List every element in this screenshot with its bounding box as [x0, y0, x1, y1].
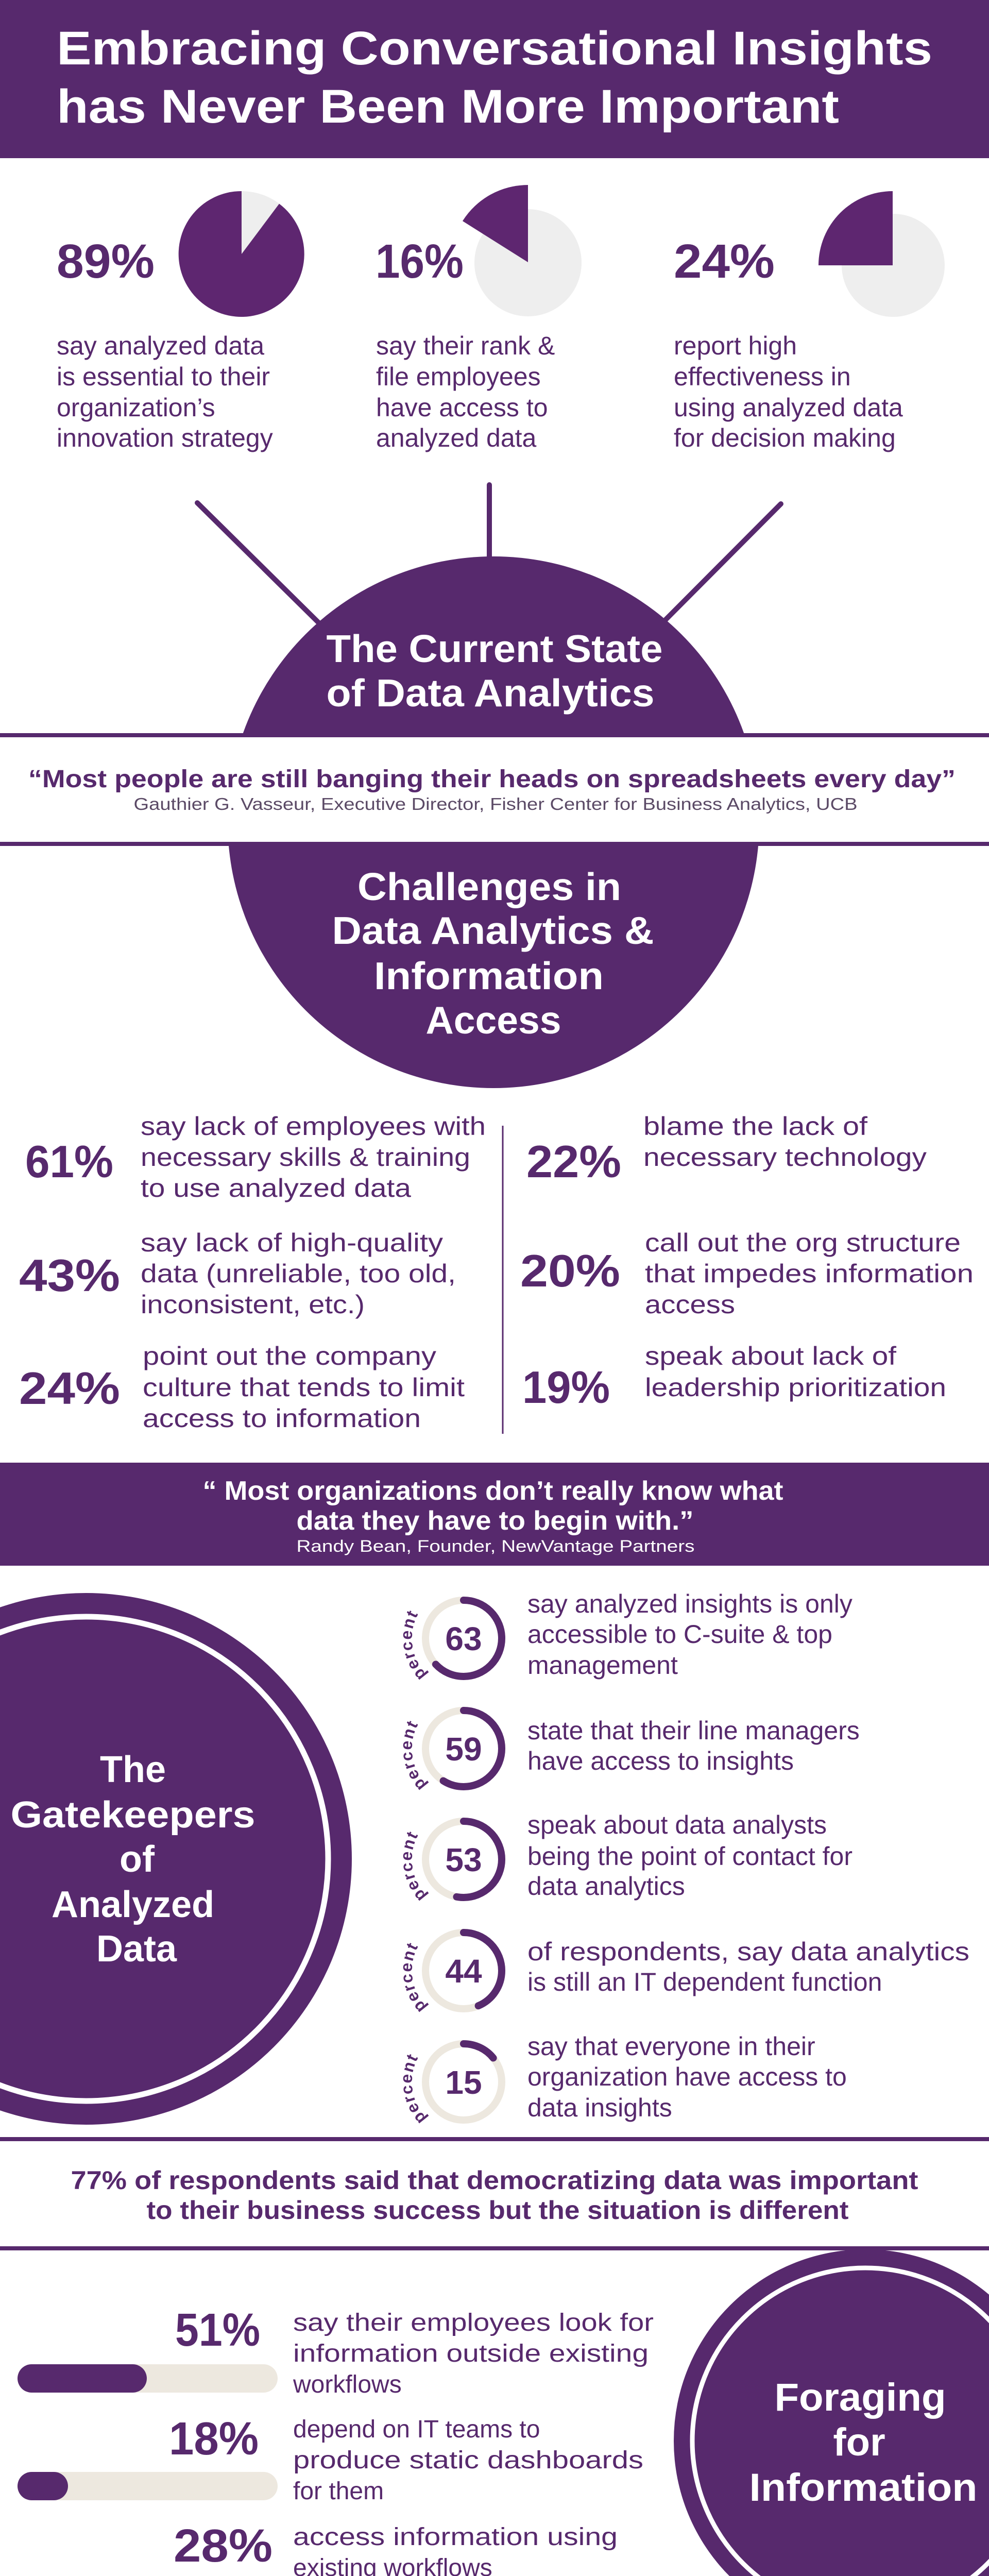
challenges: left column: inconsistent, etc.) [141, 1290, 365, 1319]
heading: challenges [332, 865, 654, 1042]
ring stat 44: 44 [445, 1953, 482, 1990]
challenges: left column: to use analyzed data [141, 1174, 411, 1202]
gatekeepers circle [0, 1593, 352, 2125]
title: has Never Been More Important [57, 80, 839, 133]
ring stat 63: say analyzed insights is only [527, 1589, 852, 1618]
foraging circle [674, 2249, 989, 2576]
heading: current state: of Data Analytics [327, 671, 654, 715]
ring stat 63: percent [403, 1611, 429, 1680]
bar stat 51% [18, 2304, 654, 2398]
bar stat 18% [18, 2413, 643, 2505]
bar stat 18%: depend on IT teams to [293, 2416, 540, 2443]
big circle: current state / challenges [0, 556, 989, 1088]
ring stat 63: accessible to C-suite & top [527, 1620, 832, 1649]
ring stat 53: percent [403, 1832, 429, 1901]
ring stat 15: percent [403, 2054, 429, 2124]
bar stat 28%: access information using [293, 2523, 618, 2551]
ring stat 59 [403, 1707, 860, 1790]
quote band 2: Randy Bean, Founder, NewVantage Partners [297, 1537, 694, 1555]
heading: gatekeepers: Analyzed [52, 1884, 214, 1925]
stat: 16%: say their rank & [376, 331, 555, 360]
challenges: right column: call out the org structure [645, 1228, 961, 1257]
stat: 89%: 89% [57, 234, 155, 288]
stat: 16%: have access to [376, 393, 548, 422]
ring stat 53: speak about data analysts [527, 1810, 827, 1839]
stat: 24%: effectiveness in [674, 362, 851, 391]
ring stat 53: 53 [445, 1841, 482, 1878]
challenges: right column: blame the lack of [643, 1112, 867, 1141]
challenges: left column: necessary skills & training [141, 1143, 470, 1172]
ring stat 53: being the point of contact for [527, 1842, 852, 1871]
heading: current state [327, 627, 662, 715]
stat: 89%: say analyzed data [57, 331, 264, 360]
ring stat 53: data analytics [527, 1872, 685, 1901]
stat: 24% [674, 191, 945, 452]
stat: 89% [57, 191, 304, 452]
ring stat 63: management [527, 1651, 678, 1680]
pie chart 89% [179, 191, 304, 317]
challenges: right column: that impedes information [645, 1259, 974, 1288]
stat: 16%: file employees [376, 362, 541, 391]
challenges: right column: 20% [520, 1245, 620, 1296]
ring stat 59: 59 [445, 1731, 482, 1768]
ring stat 59: percent [403, 1721, 429, 1790]
heading: challenges: Access [425, 998, 561, 1042]
heading: gatekeepers: Gatekeepers [10, 1794, 255, 1836]
heading: challenges: Challenges in [357, 865, 621, 908]
heading: gatekeepers: of [120, 1839, 155, 1880]
challenges: right column: access [645, 1290, 735, 1319]
challenges: left column: culture that tends to limit [143, 1373, 465, 1402]
bar stat 28%: 28% [174, 2520, 272, 2572]
heading: foraging [749, 2376, 978, 2510]
bar stat 18%: produce static dashboards [293, 2447, 643, 2474]
challenges: left column: say lack of high-quality [141, 1228, 443, 1257]
stat: 89%: innovation strategy [57, 423, 273, 452]
challenges: right column [520, 1112, 974, 1413]
stat: 16%: 16% [376, 234, 464, 288]
bar stat 18%: 18% [169, 2413, 259, 2465]
title [57, 22, 932, 133]
pie chart 16% [463, 185, 582, 316]
ring stat 44: is still an IT dependent function [527, 1968, 882, 1996]
bar stat 28% [18, 2520, 618, 2576]
challenges: left column: access to information [143, 1404, 421, 1433]
quote 1: “Most people are still banging their heads on spreadsheets every day” [28, 766, 956, 793]
challenges: left column [19, 1112, 486, 1433]
stat: 16%: analyzed data [376, 423, 537, 452]
ring stat 44: percent [403, 1943, 429, 2012]
heading: challenges: Data Analytics & [332, 909, 654, 952]
connector lines [197, 485, 781, 623]
challenges: left column: point out the company [143, 1342, 436, 1370]
challenges divider [502, 1126, 504, 1434]
77% statement [71, 2166, 918, 2225]
ring stat 15: organization have access to [527, 2062, 847, 2091]
pie chart 24% [819, 191, 945, 317]
quote 1 [28, 766, 956, 814]
77% statement: to their business success but the situation is different [146, 2196, 849, 2225]
challenges: left column: 61% [25, 1136, 113, 1187]
challenges: right column: necessary technology [643, 1143, 927, 1172]
ring stat 63 [403, 1589, 852, 1680]
quote band 2: “ Most organizations don’t really know what [203, 1476, 783, 1506]
challenges: right column: leadership prioritization [645, 1373, 946, 1402]
challenges: left column: data (unreliable, too old, [141, 1259, 456, 1288]
bar stat 51%: workflows [293, 2371, 402, 2398]
stat: 24%: report high [674, 331, 797, 360]
stat: 24%: using analyzed data [674, 393, 903, 422]
heading: foraging: Foraging [775, 2376, 946, 2419]
title: Embracing Conversational Insights [57, 22, 932, 75]
bar stat 18%: for them [293, 2478, 384, 2505]
ring stat 59: have access to insights [527, 1747, 794, 1775]
stat: 24%: 24% [674, 234, 775, 288]
ring stat 44 [403, 1929, 969, 2012]
ring stat 15: data insights [527, 2093, 672, 2122]
challenges: left column: 43% [19, 1250, 120, 1301]
stat: 16% [376, 185, 582, 452]
ring stat 44: of respondents, say data analytics [527, 1937, 969, 1966]
stat: 89%: is essential to their [57, 362, 270, 391]
ring stat 15 [403, 2032, 847, 2124]
heading: foraging: Information [749, 2466, 978, 2510]
ring stat 63: 63 [445, 1620, 482, 1657]
bar stat 51%: say their employees look for [293, 2309, 654, 2336]
ring stat 15: say that everyone in their [527, 2032, 815, 2061]
ring stat 15: 15 [445, 2064, 482, 2101]
heading: current state: The Current State [327, 627, 662, 670]
challenges: left column: 24% [19, 1363, 120, 1414]
stat: 89%: organization’s [57, 393, 215, 422]
quote 1: Gauthier G. Vasseur, Executive Director, Fisher Center for Business Analytics, UCB [134, 794, 857, 814]
heading: challenges: Information [374, 954, 604, 997]
header band [0, 0, 989, 158]
bar stat 51%: 51% [175, 2304, 260, 2356]
challenges: right column: 19% [522, 1362, 610, 1413]
quote band 2 [0, 1463, 989, 1566]
quote band 2: data they have to begin with.” [297, 1506, 693, 1536]
heading: gatekeepers: The [100, 1749, 166, 1790]
ring stat 53 [403, 1810, 852, 1901]
challenges: right column: speak about lack of [645, 1342, 896, 1370]
bar stat 51%: information outside existing [293, 2340, 649, 2367]
challenges: right column: 22% [526, 1136, 621, 1187]
challenges: left column: say lack of employees with [141, 1112, 486, 1141]
stat: 24%: for decision making [674, 423, 896, 452]
ring stat 59: state that their line managers [527, 1716, 860, 1745]
77% statement: 77% of respondents said that democratizing data was important [71, 2166, 918, 2195]
heading: gatekeepers: Data [96, 1928, 177, 1970]
heading: foraging: for [833, 2420, 885, 2464]
heading: gatekeepers [10, 1749, 255, 1970]
